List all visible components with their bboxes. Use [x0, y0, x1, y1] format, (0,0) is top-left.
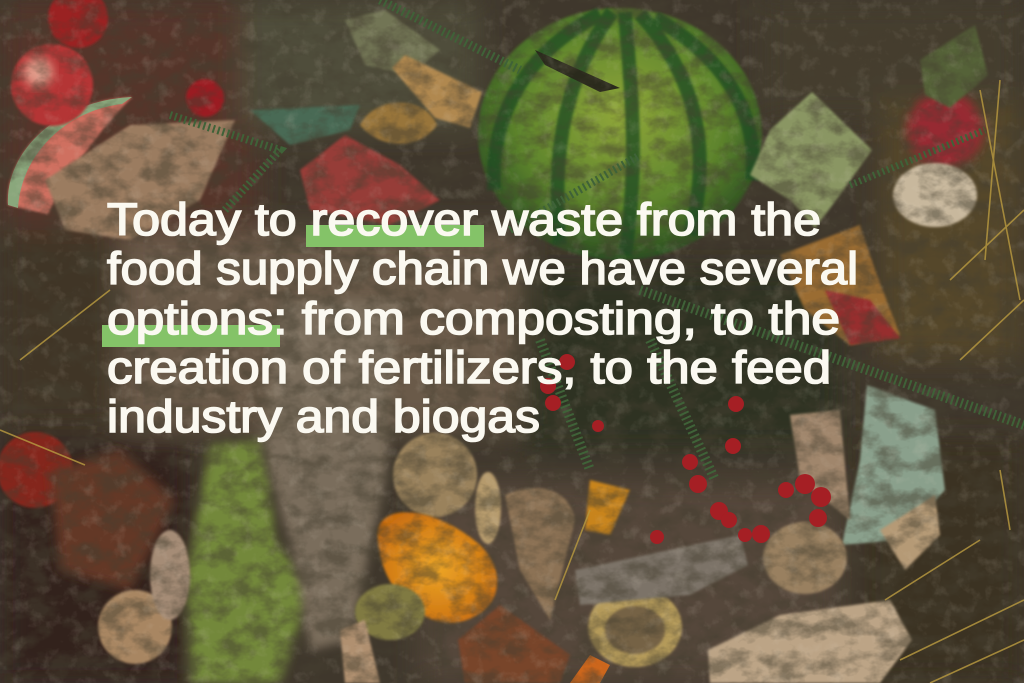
- headline text: options: from composting, to the: [107, 293, 840, 344]
- bottom items: [588, 587, 682, 667]
- moss and bark: [185, 440, 310, 683]
- apples: [11, 44, 93, 126]
- headline text: food supply chain we have several: [107, 243, 858, 294]
- watermelon: [478, 8, 762, 260]
- watermelon slice: [8, 97, 132, 214]
- leaves and peels: [45, 120, 235, 240]
- headline text: [107, 194, 858, 442]
- pine sprigs: [170, 0, 1024, 480]
- green highlight: recover: [306, 225, 484, 247]
- headline text: industry and biogas: [107, 391, 540, 442]
- green highlight: options: [102, 325, 280, 347]
- headline text: Today to recover waste from the: [107, 194, 821, 245]
- red berries: [540, 354, 831, 544]
- headline text: creation of fertilizers, to the feed: [107, 342, 831, 393]
- orange fruit: [378, 512, 497, 623]
- potatoes: [393, 433, 477, 517]
